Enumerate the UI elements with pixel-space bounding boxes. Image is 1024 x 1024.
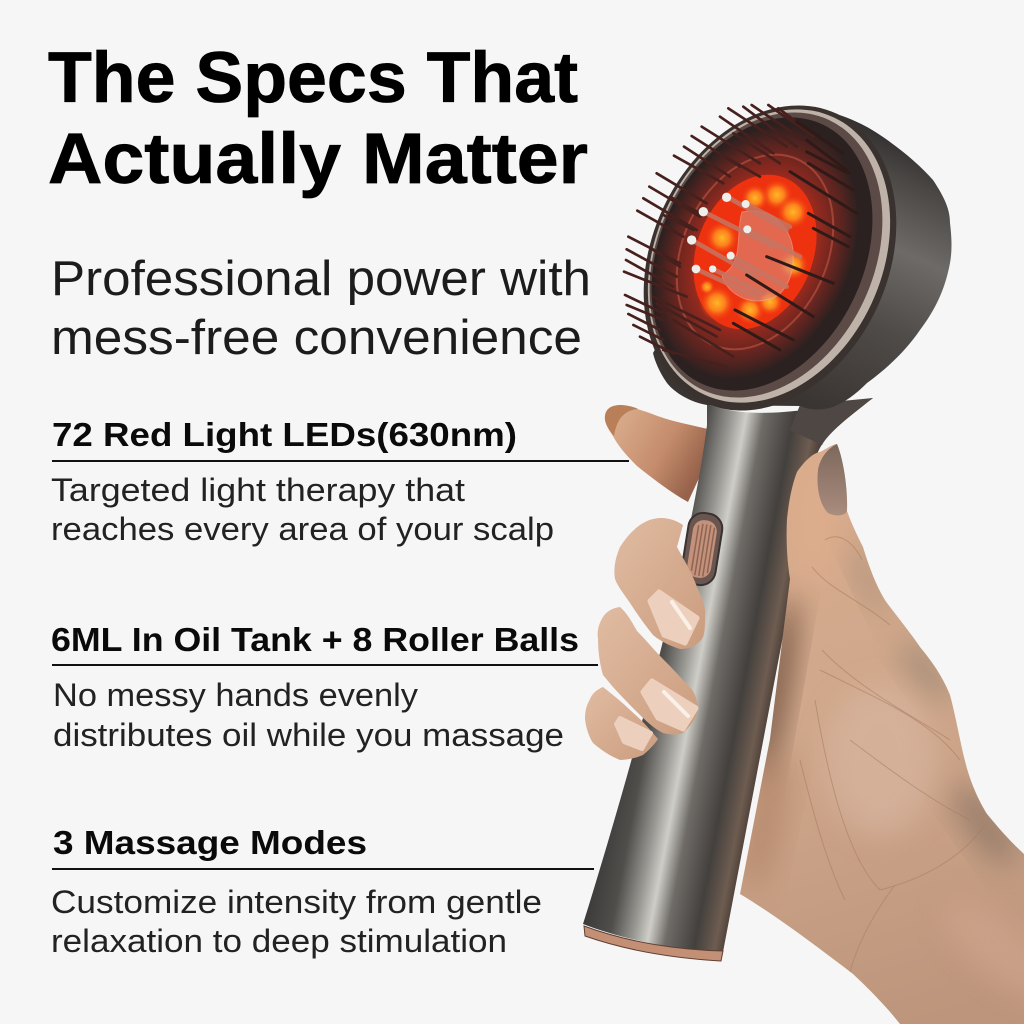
foreground bristles	[733, 122, 857, 350]
face plate	[615, 93, 897, 411]
spec: red light LEDs	[51, 416, 629, 547]
subtitle	[51, 252, 591, 365]
LED lights	[699, 179, 810, 325]
red LED panel	[671, 156, 839, 348]
subtitle: Professional power with	[51, 252, 591, 306]
rim rings	[596, 64, 944, 452]
title	[48, 39, 588, 199]
silver massage pins	[687, 193, 800, 297]
middle finger	[614, 518, 705, 649]
spec: red light LEDs: Targeted light therapy that	[51, 472, 465, 508]
spec: oil tank and roller balls: 6ML In Oil Tank + 8 Roller Balls	[51, 621, 579, 658]
spec: oil tank and roller balls: No messy hands evenly	[53, 677, 418, 713]
spec: massage modes: Customize intensity from gentle	[51, 884, 542, 920]
thumb nail	[817, 444, 847, 515]
pinky finger	[585, 687, 658, 760]
head back shell	[653, 111, 952, 410]
index finger	[605, 405, 712, 502]
spec: massage modes	[51, 824, 594, 959]
spec: massage modes: relaxation to deep stimulation	[51, 923, 507, 959]
palm and thumb	[733, 444, 1024, 1024]
spec: red light LEDs: 72 Red Light LEDs(630nm)	[52, 416, 517, 453]
inner pale pill plate	[722, 211, 793, 301]
copper base ring	[584, 926, 723, 961]
spec: oil tank and roller balls	[51, 621, 598, 753]
device head	[596, 64, 952, 452]
comb bristles	[624, 105, 817, 367]
handle	[583, 398, 873, 952]
spec: massage modes: 3 Massage Modes	[53, 824, 367, 861]
spec: oil tank and roller balls: distributes oil while you massage	[53, 717, 564, 753]
title: Actually Matter	[48, 120, 588, 199]
palm creases	[800, 537, 985, 972]
subtitle: mess-free convenience	[51, 311, 582, 365]
power button	[680, 511, 724, 587]
spec: red light LEDs: reaches every area of your scalp	[51, 511, 554, 547]
title: The Specs That	[48, 39, 578, 118]
ring finger	[598, 607, 698, 734]
illustration: hand holding scalp massager	[583, 64, 1024, 1024]
